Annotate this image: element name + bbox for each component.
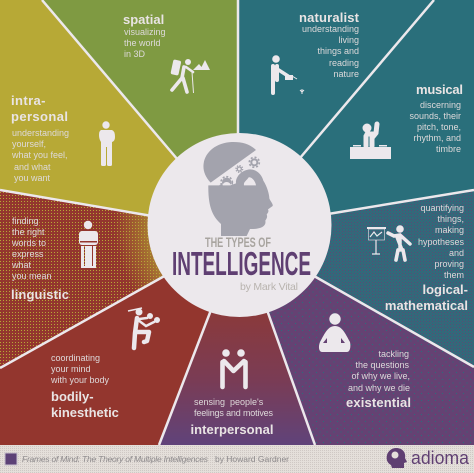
panel: interpersonal — [159, 225, 315, 445]
text: intra-personal description: yourself, — [12, 139, 46, 149]
text: naturalist description: things and — [317, 46, 359, 56]
icon: two people shaking hands — [222, 349, 246, 387]
panel: intra-personal — [0, 0, 239, 225]
text: intra-personal description: you want — [14, 173, 51, 183]
text: musical description: timbre — [436, 144, 461, 154]
title: the types of: THE TYPES OF — [205, 235, 271, 250]
icon: hiker — [170, 59, 210, 93]
heading: naturalist: naturalist — [299, 10, 360, 25]
heading: bodily-kinesthetic: bodily- — [51, 389, 94, 404]
panel: linguistic — [0, 190, 239, 368]
text: linguistic description: what — [11, 260, 32, 270]
panel: existential — [239, 225, 474, 445]
text: logical-mathematical description: them — [444, 270, 464, 280]
text: bodily-kinesthetic description: your mind — [51, 364, 91, 374]
heading: bodily-kinesthetic: kinesthetic — [51, 405, 119, 420]
text: bodily-kinesthetic description: with your body — [50, 375, 110, 385]
text: existential description: tackling — [378, 349, 409, 359]
text: logical-mathematical description: and — [449, 248, 464, 258]
text: existential description: and why we die — [348, 383, 410, 393]
text: interpersonal description: feelings and motives — [194, 408, 274, 418]
text: bodily-kinesthetic description: coordinating — [51, 353, 100, 363]
text: musical description: pitch, tone, — [417, 122, 461, 132]
text: logical-mathematical description: hypotheses — [418, 237, 464, 247]
text: linguistic description: you mean — [12, 271, 52, 281]
text: musical description: discerning — [420, 100, 461, 110]
heading: intra-personal: personal — [11, 109, 68, 124]
text: linguistic description: express — [12, 249, 44, 259]
text: musical description: sounds, their — [409, 111, 461, 121]
heading: interpersonal: interpersonal — [190, 422, 274, 437]
text: naturalist description: reading — [329, 58, 359, 68]
panel: spatial — [42, 0, 238, 225]
footer bar — [0, 445, 474, 473]
icon: meditating figure — [319, 313, 350, 352]
icon: boxer — [128, 308, 160, 348]
icon: person watering a plant — [272, 55, 304, 94]
icon: presenter with chart — [367, 225, 410, 260]
title: intelligence: INTELLIGENCE — [172, 245, 311, 282]
panel: musical — [239, 0, 474, 225]
author credit: by Mark Vital — [240, 281, 298, 293]
icon: head with gears — [203, 142, 273, 236]
text: intra-personal description: and what — [14, 162, 51, 172]
text: spatial description: in 3D — [124, 49, 146, 59]
text: spatial description: visualizing — [124, 27, 166, 37]
text: linguistic description: finding — [12, 216, 39, 226]
text: intra-personal description: understanding — [12, 128, 69, 138]
heading: spatial: spatial — [123, 12, 164, 27]
text: logical-mathematical description: things, — [437, 214, 464, 224]
text: musical description: rhythm, and — [413, 133, 461, 143]
center circle — [148, 133, 332, 317]
text: naturalist description: understanding — [302, 24, 359, 34]
panel: bodily-kinesthetic — [0, 225, 239, 445]
heading: intra-personal: intra- — [11, 93, 46, 108]
text: naturalist description: nature — [333, 69, 359, 79]
heading: logical-mathematical: mathematical — [385, 298, 468, 313]
text: logical-mathematical description: making — [435, 225, 464, 235]
text: spatial description: the world — [124, 38, 161, 48]
source citation: Frames of Mind: The Theory of Multiple Intelligences — [22, 454, 209, 464]
panel: logical-mathematical — [239, 190, 474, 367]
heading: existential: existential — [346, 395, 411, 410]
panel: naturalist — [238, 0, 434, 225]
text: logical-mathematical description: proving — [434, 259, 464, 269]
icon: speaker at lectern — [79, 221, 98, 268]
icon: thinking person — [99, 121, 115, 166]
text: interpersonal description: sensing people's — [194, 397, 263, 407]
text: linguistic description: the right — [12, 227, 45, 237]
logo: adioma: adioma — [411, 448, 470, 468]
heading: musical: musical — [416, 82, 463, 97]
text: naturalist description: living — [338, 35, 359, 45]
source citation: by Howard Gardner — [215, 454, 289, 464]
text: linguistic description: words to — [11, 238, 46, 248]
text: logical-mathematical description: quantifying — [420, 203, 464, 213]
text: existential description: the questions — [355, 360, 409, 370]
heading: linguistic: linguistic — [11, 287, 69, 302]
heading: logical-mathematical: logical- — [422, 282, 468, 297]
text: intra-personal description: what you feel, — [11, 150, 68, 160]
icon: book square — [5, 453, 17, 465]
icon: DJ at a deck — [350, 124, 391, 159]
text: existential description: of why we live, — [351, 371, 410, 381]
